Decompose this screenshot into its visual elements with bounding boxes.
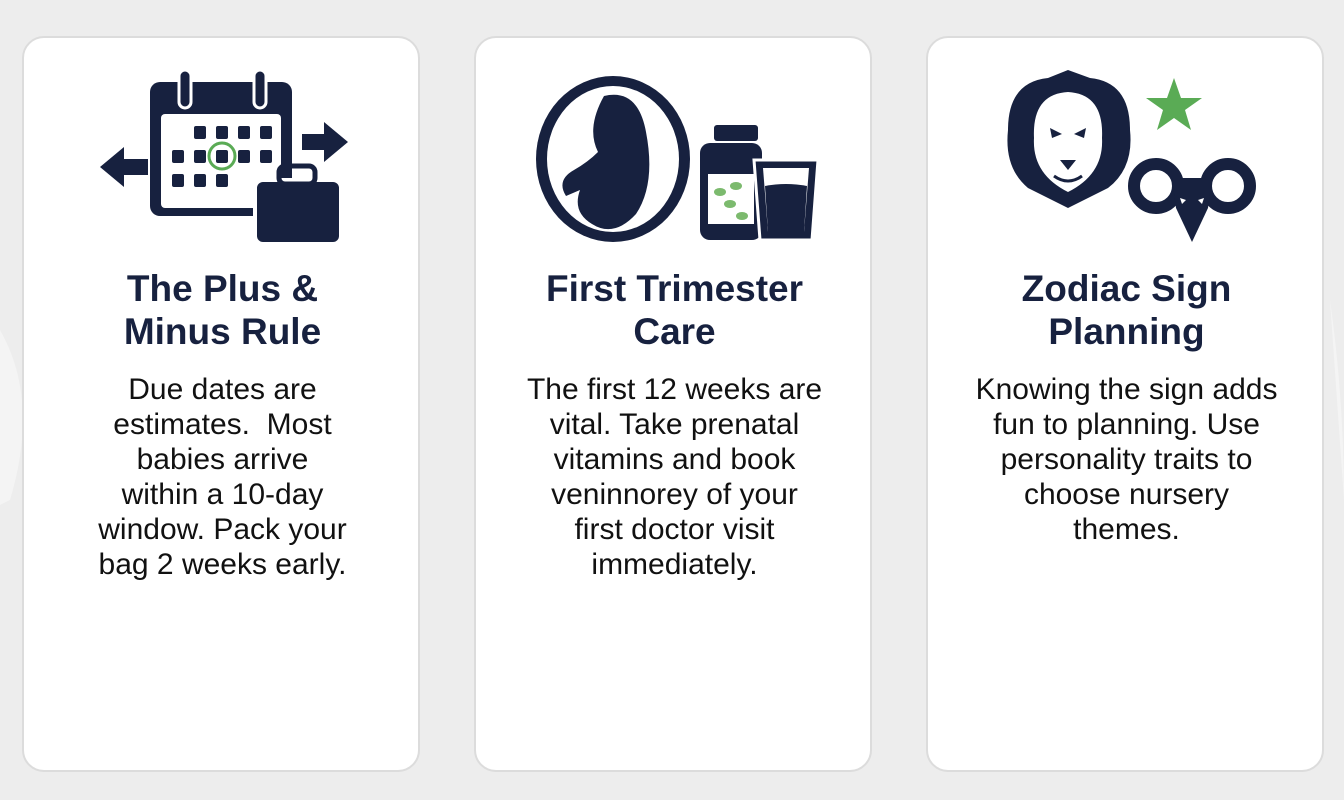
icon: calendar with arrows and suitcase: [100, 72, 348, 242]
title: Planning: [1048, 311, 1205, 352]
text block: estimates. Most: [113, 408, 332, 441]
title: First Trimester: [546, 268, 803, 309]
text block: immediately.: [591, 548, 758, 581]
title: Minus Rule: [124, 311, 321, 352]
text block: babies arrive: [137, 443, 308, 476]
title: [124, 268, 321, 352]
text block: within a 10-day: [122, 478, 323, 511]
text block: [527, 373, 822, 581]
title: Care: [633, 311, 716, 352]
text block: [976, 373, 1277, 546]
panel: plus minus rule: [22, 36, 420, 772]
text block: bag 2 weeks early.: [99, 548, 346, 581]
title: The Plus &: [127, 268, 318, 309]
text block: vital. Take prenatal: [550, 408, 799, 441]
text block: vitamins and book: [554, 443, 795, 476]
title: [546, 268, 803, 352]
title: [1022, 268, 1231, 352]
text block: The first 12 weeks are: [527, 373, 822, 406]
text block: Knowing the sign adds: [976, 373, 1277, 406]
title: Zodiac Sign: [1022, 268, 1231, 309]
text block: window. Pack your: [98, 513, 347, 546]
text block: veninnorey of your: [551, 478, 798, 511]
panel: first trimester care: [474, 36, 872, 772]
text block: personality traits to: [1001, 443, 1252, 476]
panel: zodiac sign planning: [926, 36, 1324, 772]
text block: [98, 373, 347, 581]
text block: choose nursery: [1024, 478, 1229, 511]
icon: fetus, vitamins, water: [536, 76, 816, 242]
text block: themes.: [1073, 513, 1180, 546]
text block: fun to planning. Use: [993, 408, 1260, 441]
icon: lion, ram, star: [1007, 70, 1256, 242]
text block: first doctor visit: [574, 513, 775, 546]
text block: Due dates are: [128, 373, 317, 406]
